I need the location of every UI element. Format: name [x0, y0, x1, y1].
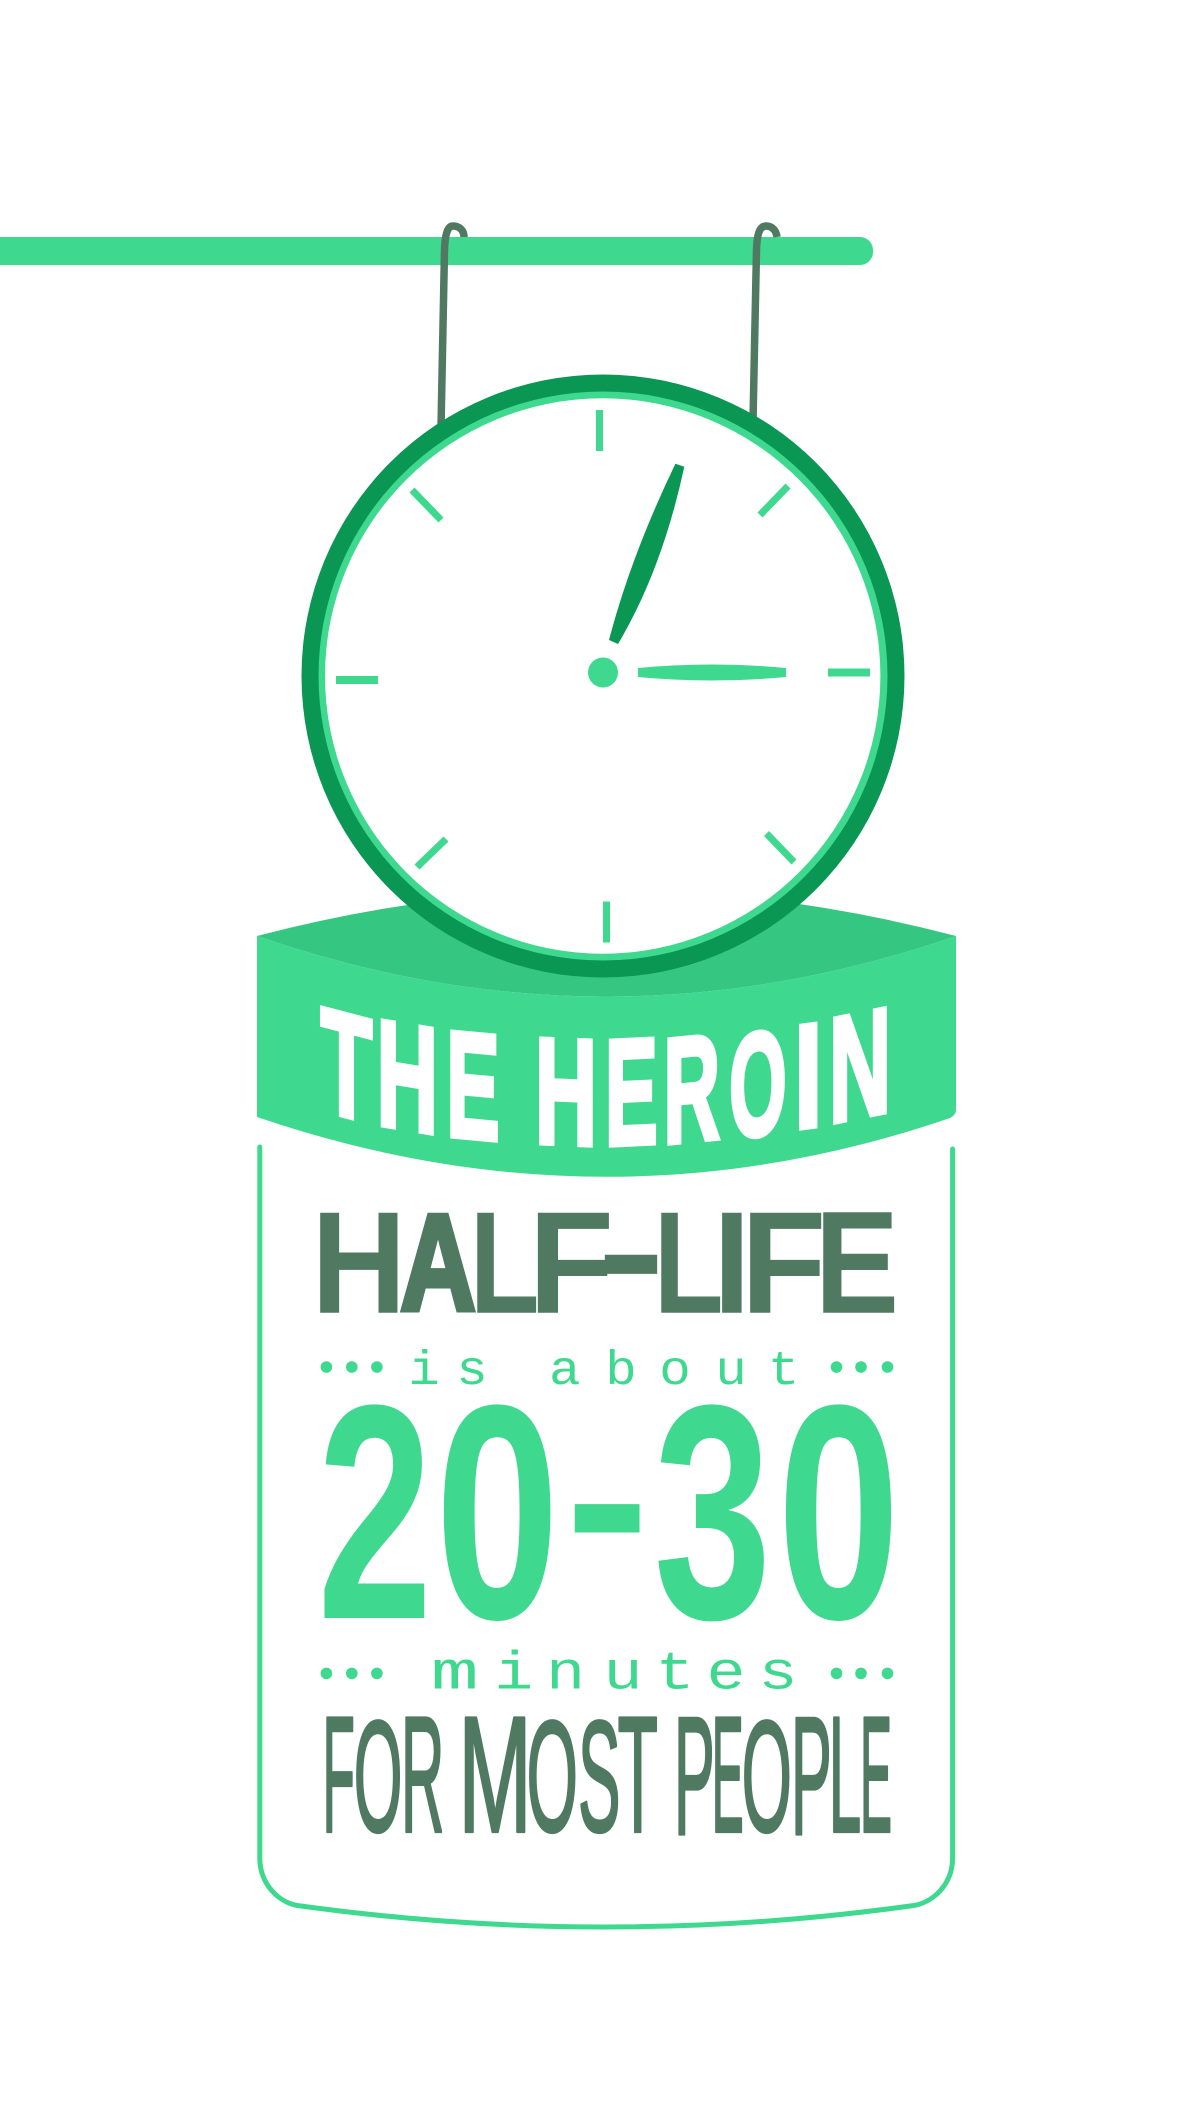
big number: 20-30: [317, 1341, 900, 1684]
hour ticks: [336, 410, 870, 942]
heading: half-life: E: [815, 1180, 899, 1344]
lid front: [257, 936, 956, 1177]
text: for most people: P: [674, 1682, 715, 1870]
text row: is about: [321, 1345, 893, 1399]
text: for most people: P: [791, 1682, 832, 1870]
text: for most people: E: [712, 1682, 744, 1867]
word: inutes: [494, 1644, 798, 1705]
heading: half-life: I: [713, 1181, 751, 1344]
big number: 20-30: 2: [317, 1343, 432, 1684]
text: for most people: R: [401, 1684, 444, 1867]
heading: the heroin: H: [535, 1008, 597, 1178]
heading: half-life: A: [400, 1186, 476, 1339]
dots left: [321, 1668, 383, 1679]
heading: half-life: F: [741, 1182, 826, 1344]
hanging rail: [0, 237, 873, 265]
big number: 20-30: 0: [777, 1341, 900, 1683]
hour hand: [638, 664, 786, 680]
heading: the heroin: E: [605, 1006, 658, 1178]
text row: minutes: [321, 1644, 893, 1705]
heading: the heroin: T: [320, 976, 372, 1155]
clock rim: [302, 374, 904, 978]
dots right: [831, 1668, 893, 1679]
text: for most people: S: [578, 1688, 620, 1865]
text: for most people: M: [458, 1683, 532, 1868]
word: m: [431, 1644, 479, 1705]
big number: 20-30: 0: [435, 1341, 560, 1683]
big number: 20-30: 3: [654, 1341, 771, 1683]
heading: half-life: -: [597, 1162, 665, 1340]
words: isabout: [408, 1345, 799, 1399]
clock: [302, 374, 904, 978]
heading: half-life: H: [311, 1183, 406, 1344]
right hook: [753, 226, 777, 421]
heading: the heroin: R: [664, 1004, 720, 1176]
text: for most people: E: [860, 1682, 892, 1867]
heading: the heroin: [320, 976, 891, 1178]
dots left: [321, 1361, 383, 1373]
text: for most people: F: [322, 1682, 355, 1867]
text: for most people: L: [829, 1683, 861, 1868]
heading: the heroin: H: [376, 989, 438, 1167]
heading: half-life: L: [654, 1182, 724, 1344]
heading: half-life: [311, 1162, 899, 1344]
center pin: [588, 658, 618, 688]
heading: the heroin: N: [829, 977, 891, 1156]
lid back: [257, 890, 956, 996]
big number: 20-30: -: [565, 1366, 650, 1631]
jar lid band: [257, 890, 956, 1177]
hanger wires: [441, 226, 777, 428]
dots right: [831, 1361, 893, 1373]
minute hand: [609, 464, 684, 644]
heading: the heroin: O: [729, 997, 787, 1171]
clock face: [325, 398, 880, 954]
text: for most people: O: [527, 1687, 578, 1865]
text: for most people: O: [742, 1688, 792, 1865]
heading: the heroin: I: [794, 992, 823, 1161]
heading: half-life: F: [528, 1182, 614, 1344]
text: for most people: [322, 1682, 892, 1870]
clock inner rim: [318, 392, 888, 960]
heading: the heroin: E: [446, 999, 500, 1173]
text: for most people: O: [354, 1689, 402, 1865]
text: for most people: T: [618, 1682, 658, 1867]
heading: half-life: L: [470, 1182, 540, 1344]
left hook: [441, 226, 464, 428]
jar outline: [260, 1147, 953, 1927]
